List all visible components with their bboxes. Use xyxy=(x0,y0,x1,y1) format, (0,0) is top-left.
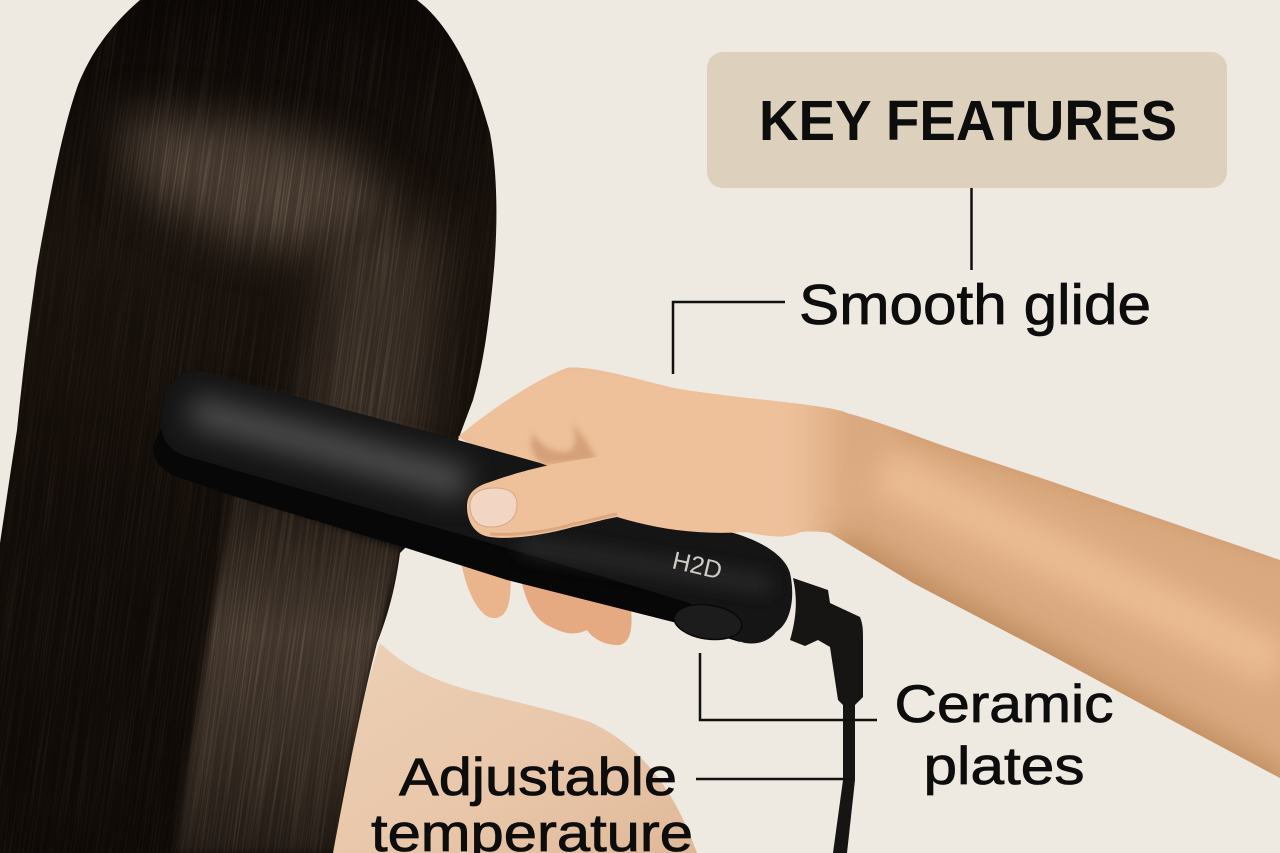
fingers under iron xyxy=(460,555,632,645)
collar and cord xyxy=(790,578,863,853)
hair straightener xyxy=(153,370,863,853)
label: ceramic plates xyxy=(700,653,1114,796)
connector: badge to smooth glide xyxy=(970,188,973,270)
title badge xyxy=(707,52,1227,188)
knuckle fold xyxy=(531,422,597,465)
label: smooth glide xyxy=(673,273,1151,374)
label: adjustable temperature xyxy=(371,748,853,853)
thumb shadow xyxy=(490,514,617,534)
label: ceramic plates: Ceramic xyxy=(894,675,1114,734)
thumbnail xyxy=(470,488,517,527)
lower plate xyxy=(153,420,790,642)
arm lower edge shade xyxy=(830,550,1280,795)
shoulder xyxy=(330,643,697,853)
heading: KEY FEATURES xyxy=(759,89,1177,153)
hair shine and lit bundle xyxy=(108,94,454,853)
button xyxy=(672,600,744,644)
arm and hand xyxy=(458,368,1280,778)
label: ceramic plates: plates xyxy=(924,737,1084,796)
body highlight right xyxy=(520,535,770,595)
thumb over iron xyxy=(467,454,760,538)
hair xyxy=(0,0,496,853)
label: adjustable temperature: Adjustable xyxy=(399,748,677,807)
faint hair strands xyxy=(0,0,494,853)
arm upper edge shade xyxy=(900,428,1280,555)
brand: H2D xyxy=(670,547,725,585)
arm centre highlight xyxy=(880,470,1280,665)
body xyxy=(161,370,792,643)
body highlight xyxy=(188,395,470,500)
label: smooth glide: Smooth glide xyxy=(799,273,1151,337)
hand light patch xyxy=(458,368,832,536)
